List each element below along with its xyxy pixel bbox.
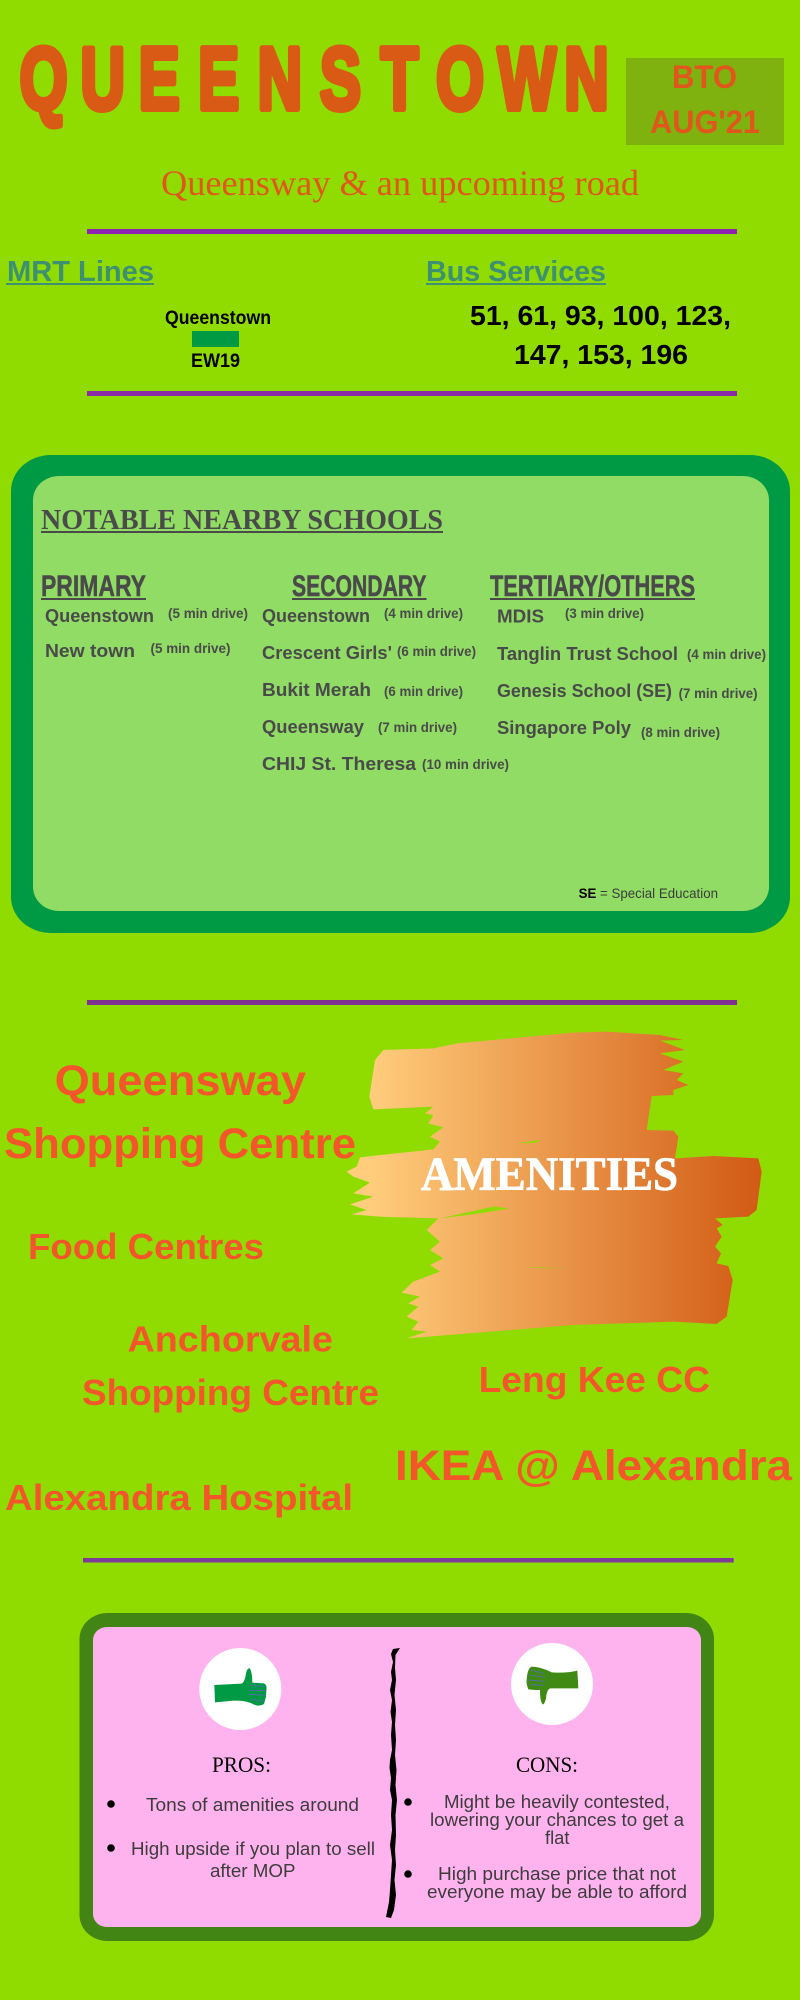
column: secondary xyxy=(262,570,509,774)
heading: Bus Services: Bus Services xyxy=(426,256,606,288)
heading: cons: CONS: xyxy=(516,1752,578,1777)
column: tertiary and others: (3 min drive) xyxy=(565,606,644,621)
MRT station marker: EW19 xyxy=(191,351,240,372)
column: tertiary and others: (4 min drive) xyxy=(687,647,766,662)
list: cons: Might be heavily contested, xyxy=(444,1792,670,1812)
amenity: Anchorvale Shopping Centre: Shopping Centre xyxy=(82,1372,379,1413)
amenity: Queensway Shopping Centre: Shopping Centre xyxy=(4,1120,356,1168)
column: secondary: SECONDARY xyxy=(292,570,426,603)
amenity: Food Centres: Food Centres xyxy=(28,1226,264,1267)
column: secondary: (4 min drive) xyxy=(384,606,463,621)
divider xyxy=(386,1648,400,1918)
column: tertiary and others: Tanglin Trust School xyxy=(497,643,678,664)
panel frame xyxy=(11,455,790,933)
list: cons xyxy=(404,1792,687,1902)
column: tertiary and others xyxy=(490,570,766,740)
column: primary: PRIMARY xyxy=(41,570,146,603)
subtitle: Queensway & an upcoming road xyxy=(161,163,639,203)
list: cons: flat xyxy=(545,1828,570,1848)
heading: pros: PROS: xyxy=(212,1752,271,1777)
icon: thumbs up xyxy=(199,1648,281,1730)
column: tertiary and others: MDIS xyxy=(497,606,544,626)
column: primary: (5 min drive) xyxy=(150,641,230,656)
column: tertiary and others: Singapore Poly xyxy=(497,717,632,738)
list: cons: High purchase price that not xyxy=(438,1864,676,1884)
list: cons: lowering your chances to get a xyxy=(430,1810,685,1830)
amenity: Queensway Shopping Centre xyxy=(4,1057,356,1168)
column: secondary: (7 min drive) xyxy=(378,720,457,735)
panel: pros and cons xyxy=(80,1613,714,1941)
bus service numbers: 51, 61, 93, 100, 123, xyxy=(470,300,731,331)
badge: BTO date: AUG'21 xyxy=(650,104,760,140)
heading: amenities: AMENITIES xyxy=(421,1148,678,1201)
column: secondary: (10 min drive) xyxy=(422,757,509,772)
bus service numbers: 147, 153, 196 xyxy=(514,339,688,370)
panel frame xyxy=(80,1613,714,1941)
column: tertiary and others: Genesis School (SE) xyxy=(497,680,672,701)
badge: BTO date: BTO xyxy=(672,59,737,95)
MRT station marker: Queenstown xyxy=(165,308,271,329)
column: secondary: Queenstown xyxy=(262,605,370,626)
panel fill xyxy=(33,476,769,911)
column: primary: Queenstown xyxy=(45,605,154,626)
column: primary: New town xyxy=(45,640,135,661)
list: cons: everyone may be able to afford xyxy=(427,1882,687,1902)
panel fill xyxy=(93,1627,701,1927)
column: secondary: Crescent Girls' xyxy=(262,642,392,663)
column: secondary: CHIJ St. Theresa xyxy=(262,753,417,774)
bus service numbers xyxy=(470,300,731,370)
list: pros: after MOP xyxy=(210,1861,296,1881)
column: secondary: (6 min drive) xyxy=(384,684,463,699)
column: tertiary and others: (7 min drive) xyxy=(679,686,758,701)
icon: thumbs down xyxy=(511,1643,593,1725)
heading: notable nearby schools: NOTABLE NEARBY SCHOOLS xyxy=(41,504,443,536)
amenity: Leng Kee CC: Leng Kee CC xyxy=(479,1359,710,1400)
column: secondary: (6 min drive) xyxy=(397,644,476,659)
column: primary xyxy=(41,570,248,661)
list: pros xyxy=(107,1795,375,1881)
amenity: Anchorvale Shopping Centre: Anchorvale xyxy=(128,1318,333,1360)
panel: schools xyxy=(11,455,790,933)
column: secondary: Bukit Merah xyxy=(262,679,371,700)
MRT station marker xyxy=(165,308,271,372)
column: tertiary and others: (8 min drive) xyxy=(641,725,720,740)
amenity: IKEA @ Alexandra: IKEA @ Alexandra xyxy=(395,1442,793,1490)
column: secondary: Queensway xyxy=(262,716,365,737)
badge: BTO date xyxy=(626,58,784,145)
brush stroke xyxy=(347,1032,762,1338)
list: pros: High upside if you plan to sell xyxy=(131,1839,375,1859)
column: tertiary and others: TERTIARY/OTHERS xyxy=(490,570,695,603)
heading: MRT Lines: MRT Lines xyxy=(7,256,154,288)
amenity: Anchorvale Shopping Centre xyxy=(82,1318,379,1413)
amenity: Alexandra Hospital: Alexandra Hospital xyxy=(5,1477,353,1518)
column: primary: (5 min drive) xyxy=(168,606,248,621)
amenity: Queensway Shopping Centre: Queensway xyxy=(55,1057,306,1105)
footnote: SE: SE = Special Education xyxy=(579,885,718,901)
list: pros: Tons of amenities around xyxy=(146,1795,359,1815)
title: QUEENSTOWN xyxy=(20,30,609,129)
